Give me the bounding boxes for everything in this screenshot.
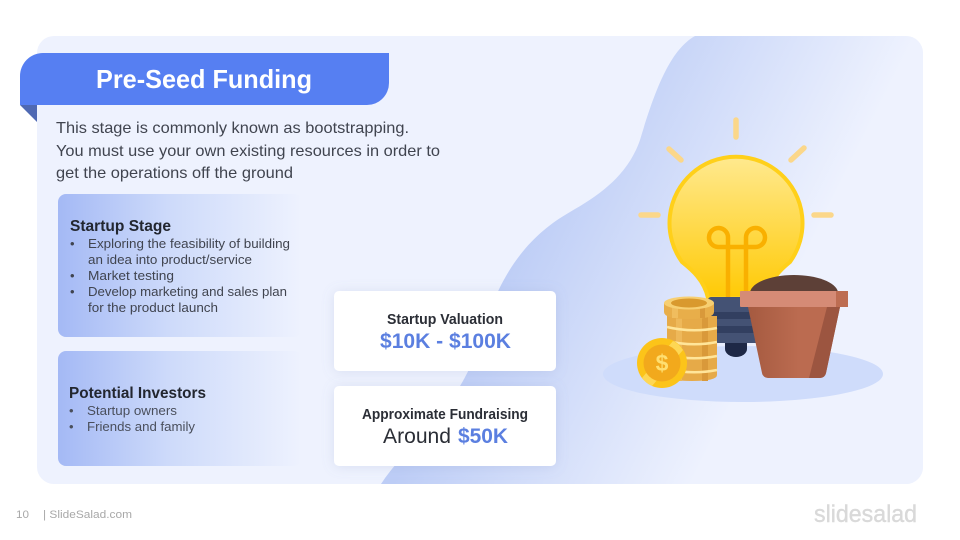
footer: page number and site: | SlideSalad.com — [43, 509, 132, 521]
panel: startup stage: • — [70, 268, 75, 283]
intro text — [56, 120, 440, 182]
icon: coin stack — [664, 296, 717, 381]
panel: startup stage: Market testing — [88, 268, 174, 283]
icon: plant pot — [740, 275, 848, 378]
title ribbon — [20, 53, 389, 122]
panel: potential investors: Friends and family — [87, 419, 195, 434]
panel: background — [37, 36, 923, 484]
card: startup valuation: $10K - $100K — [380, 330, 511, 353]
icon: dollar coin: $ — [656, 350, 669, 376]
panel: startup stage: • — [70, 236, 75, 251]
panel: potential investors: Potential Investors — [69, 385, 206, 402]
panel: potential investors: • — [69, 403, 74, 418]
intro text: This stage is commonly known as bootstrapping. — [56, 120, 409, 137]
card: approximate fundraising — [334, 386, 556, 466]
icon: light rays — [641, 120, 831, 215]
panel: startup stage — [58, 194, 302, 337]
illustration: shadow ellipse — [603, 346, 883, 402]
panel: potential investors — [58, 351, 302, 466]
panel: potential investors: • — [69, 419, 74, 434]
panel: startup stage: Startup Stage — [70, 218, 171, 235]
icon: light bulb — [670, 157, 802, 357]
card: startup valuation — [334, 291, 556, 371]
intro text: get the operations off the ground — [56, 165, 293, 182]
card: approximate fundraising: Approximate Fundraising — [362, 407, 528, 423]
intro text: You must use your own existing resources in order to — [56, 143, 440, 160]
card: approximate fundraising: $50K — [458, 425, 508, 448]
panel: startup stage: an idea into product/service — [88, 252, 252, 267]
title ribbon: Pre-Seed Funding — [96, 64, 312, 94]
footer: logo: slidesalad — [814, 501, 917, 528]
footer: page number and site: 10 — [16, 509, 29, 521]
panel: startup stage: • — [70, 284, 75, 299]
panel: potential investors: Startup owners — [87, 403, 178, 418]
panel: startup stage: Exploring the feasibility of building — [88, 236, 290, 251]
card: startup valuation: Startup Valuation — [387, 312, 503, 328]
panel: startup stage: Develop marketing and sales plan — [88, 284, 287, 299]
panel: startup stage: for the product launch — [88, 300, 218, 315]
card: approximate fundraising: Around — [383, 425, 451, 448]
icon: dollar coin — [637, 338, 687, 388]
